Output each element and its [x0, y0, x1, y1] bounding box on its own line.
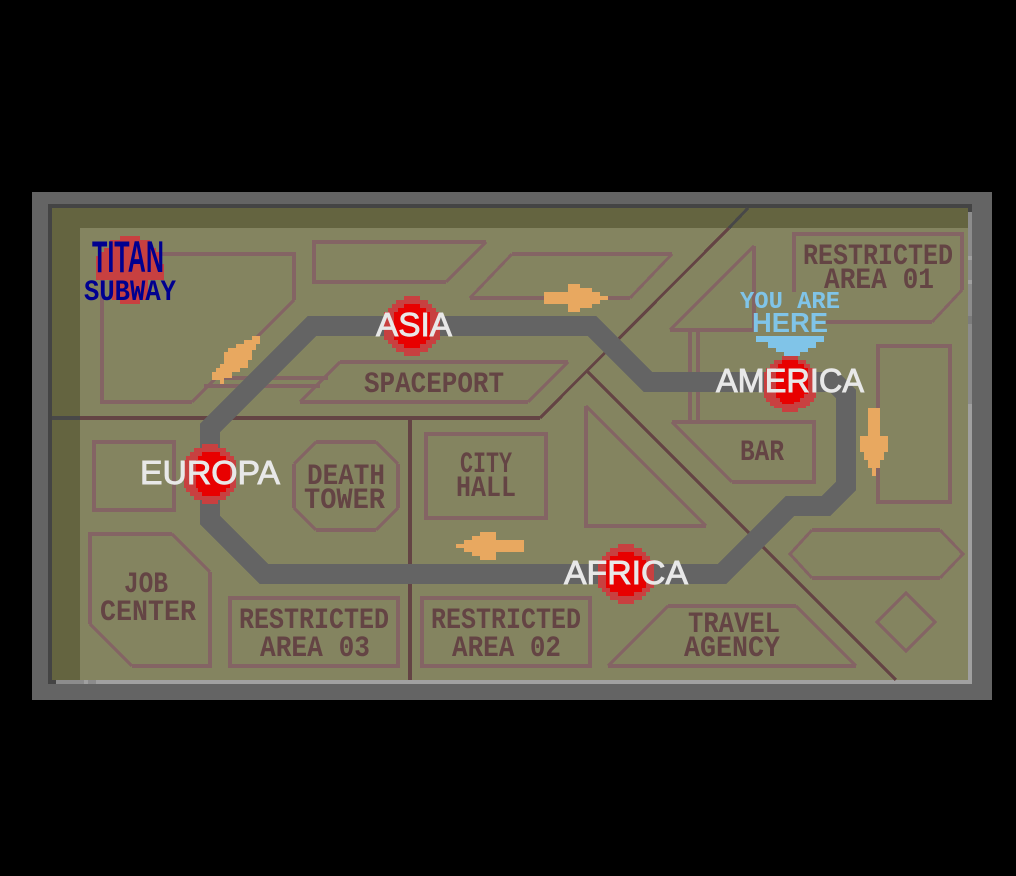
label: Spaceport: SPACEPORT: [364, 368, 504, 402]
logo: Titan Subway: [84, 233, 176, 310]
station name: America: AMERICA: [716, 362, 864, 399]
label: Center: CENTER: [100, 596, 196, 630]
label: City: CITY: [460, 448, 512, 482]
station name: Africa: AFRICA: [564, 554, 688, 591]
logo: Titan Subway: TITAN: [92, 233, 164, 282]
label: Death: DEATH: [307, 460, 385, 494]
station name: Asia: ASIA: [376, 306, 452, 343]
arrow: north-east: [212, 336, 260, 384]
station marker: Africa: [598, 544, 654, 604]
district boundary lines: [52, 208, 896, 680]
subway line: [210, 326, 846, 574]
label: Hall: HALL: [456, 472, 516, 506]
arrow: south: [860, 408, 888, 476]
station marker: America: [764, 356, 816, 412]
building outlines: [90, 234, 963, 666]
label: Agency: AGENCY: [684, 632, 780, 666]
station marker: Asia: [384, 296, 440, 356]
station marker: Europa: [184, 444, 236, 504]
arrow: east: [544, 284, 608, 312]
you are here marker: [740, 289, 840, 356]
label: Travel: TRAVEL: [688, 608, 780, 642]
map frame: [32, 192, 992, 700]
label: Area 02: AREA 02: [452, 632, 561, 666]
label: Bar: BAR: [740, 436, 784, 470]
label: Tower: TOWER: [304, 484, 385, 518]
label: Restricted (03): RESTRICTED: [239, 604, 389, 638]
label: Job: JOB: [124, 568, 168, 602]
you are here marker: YOU ARE: [740, 289, 840, 316]
label: Area 01: AREA 01: [824, 264, 934, 298]
logo: Titan Subway: SUBWAY: [84, 276, 176, 310]
label: Restricted (01): RESTRICTED: [803, 240, 953, 274]
you are here marker: HERE: [752, 307, 828, 338]
label: Restricted (02): RESTRICTED: [431, 604, 581, 638]
station name: Europa: EUROPA: [140, 454, 280, 491]
label: Area 03: AREA 03: [260, 632, 370, 666]
arrow: west: [456, 532, 524, 560]
